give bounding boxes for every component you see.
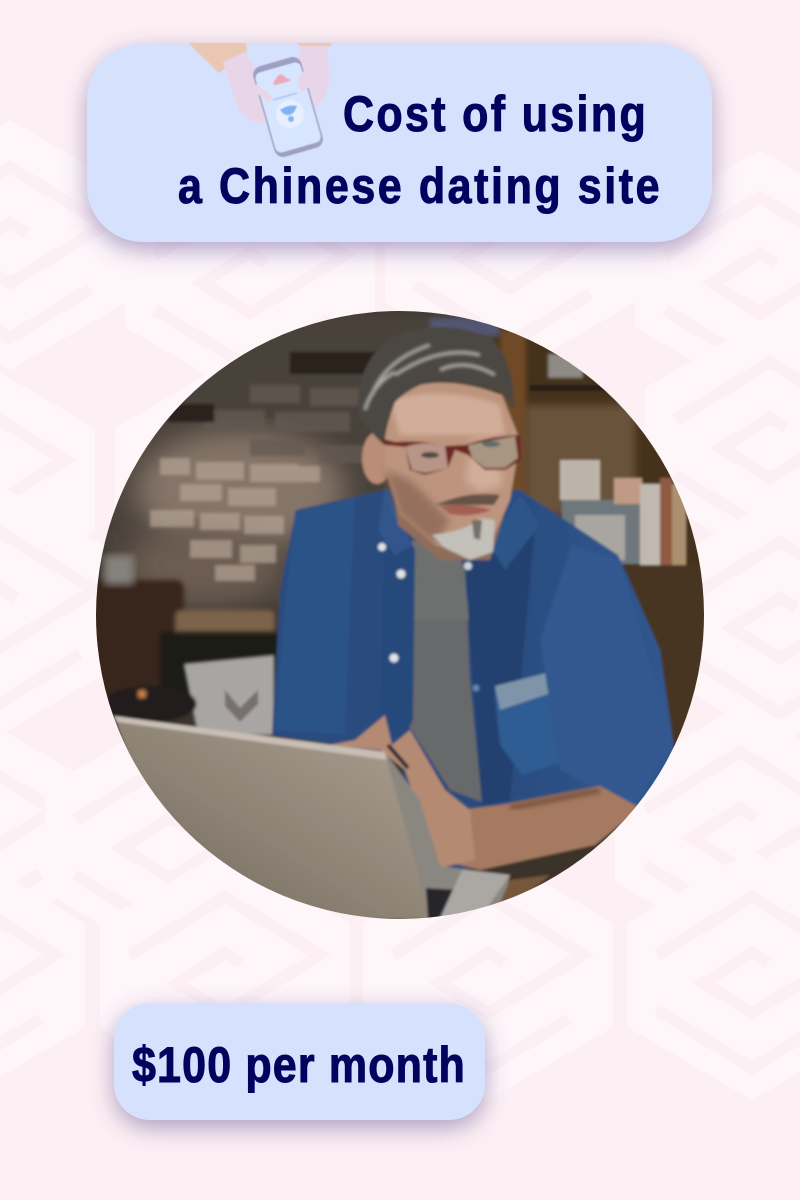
- title text: a Chinese dating site: [178, 158, 660, 214]
- man: neck and head: [358, 327, 521, 560]
- laptop: [114, 716, 550, 925]
- man: forearm and hands: [330, 715, 640, 870]
- photo backdrop: bookshelf: [430, 310, 710, 745]
- title panel: [87, 43, 712, 242]
- price panel: [114, 1003, 485, 1120]
- photo backdrop: brick wall: [96, 311, 676, 919]
- icon: hands holding phone: [188, 43, 332, 159]
- man: torso and denim shirt: [272, 488, 675, 880]
- price text: $100 per month: [132, 1037, 465, 1093]
- photo backdrop: chair, cushion, candle: [92, 555, 280, 735]
- title text: Cost of using: [343, 86, 646, 142]
- circular photo: man with laptop: [85, 300, 715, 930]
- title text: [178, 86, 660, 214]
